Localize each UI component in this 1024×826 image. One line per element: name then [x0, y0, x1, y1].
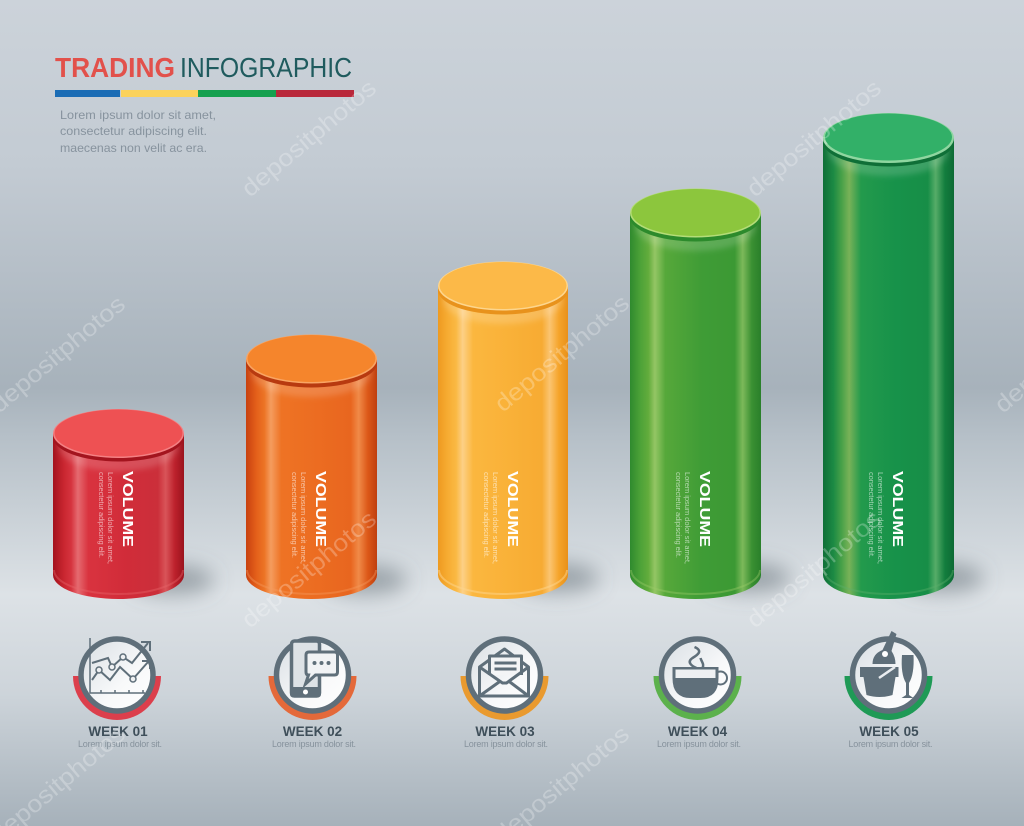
- icon: open envelope: [460, 639, 548, 720]
- icon: chart: [73, 638, 161, 720]
- label: week 04: Lorem ipsum dolor sit.: [657, 739, 741, 749]
- cylinder shadows: [130, 563, 984, 595]
- cylinder: week 05 green: consectetur adipiscing elit.: [867, 472, 876, 558]
- label: week 04: [657, 724, 741, 749]
- intro text: [60, 108, 216, 155]
- cylinder: week 05 green: Lorem ipsum dolor sit amet,: [876, 472, 885, 564]
- cylinder: week 01 red: Lorem ipsum dolor sit amet,: [106, 472, 115, 564]
- cylinder: week 02 orange: consectetur adipiscing elit.: [290, 472, 299, 558]
- intro text: maecenas non velit ac era.: [60, 141, 207, 155]
- watermark: depositphotos: [237, 506, 382, 634]
- label: week 01: Lorem ipsum dolor sit.: [78, 739, 162, 749]
- label: week 05: Lorem ipsum dolor sit.: [848, 739, 932, 749]
- icon: coffee cup: [654, 639, 742, 720]
- cylinder: week 04 light green: VOLUME: [696, 471, 713, 547]
- title: [55, 52, 352, 83]
- cylinder: week 03 yellow: VOLUME: [504, 471, 521, 547]
- intro text: consectetur adipiscing elit.: [60, 124, 207, 138]
- title: INFOGRAPHIC: [180, 52, 352, 83]
- cylinder: week 02 orange: VOLUME: [312, 471, 329, 547]
- cylinder: week 01 red: [53, 409, 184, 599]
- cylinder: week 02 orange: Lorem ipsum dolor sit amet,: [299, 472, 308, 564]
- label: week 05: [848, 724, 932, 749]
- watermark: depositphotos: [742, 506, 887, 634]
- title colour rule: [55, 90, 354, 97]
- label: week 01: [78, 724, 162, 749]
- cylinder: week 04 light green: Lorem ipsum dolor sit amet,: [683, 472, 692, 564]
- cylinder: week 01 red: consectetur adipiscing elit.: [97, 472, 106, 558]
- label: week 02: Lorem ipsum dolor sit.: [272, 739, 356, 749]
- label: week 04: WEEK 04: [668, 724, 728, 739]
- label: week 02: [272, 724, 356, 749]
- icon: champagne bucket: [844, 631, 932, 720]
- cylinder: week 05 green: [823, 113, 954, 599]
- icon: phone with speech bubble: [268, 639, 356, 720]
- cylinder: week 01 red: VOLUME: [119, 471, 136, 547]
- title: TRADING: [55, 52, 175, 83]
- cylinder: week 05 green: VOLUME: [889, 471, 906, 547]
- intro text: Lorem ipsum dolor sit amet,: [60, 108, 216, 122]
- label: week 02: WEEK 02: [283, 724, 342, 739]
- label: week 03: Lorem ipsum dolor sit.: [464, 739, 548, 749]
- label: week 01: WEEK 01: [88, 724, 148, 739]
- cylinder: week 04 light green: consectetur adipiscing elit.: [674, 472, 683, 558]
- label: week 03: WEEK 03: [475, 724, 535, 739]
- label: week 05: WEEK 05: [859, 724, 919, 739]
- cylinder: week 02 orange: [246, 334, 377, 599]
- cylinder: week 04 light green: [630, 188, 761, 599]
- watermark: depositphotos: [490, 290, 635, 418]
- label: week 03: [464, 724, 548, 749]
- cylinder: week 03 yellow: consectetur adipiscing elit.: [482, 472, 491, 558]
- cylinder: week 03 yellow: Lorem ipsum dolor sit amet,: [491, 472, 500, 564]
- watermark: depositphotos: [237, 75, 382, 203]
- cylinder: week 03 yellow: [438, 262, 568, 599]
- watermark: depositphotos: [742, 75, 887, 203]
